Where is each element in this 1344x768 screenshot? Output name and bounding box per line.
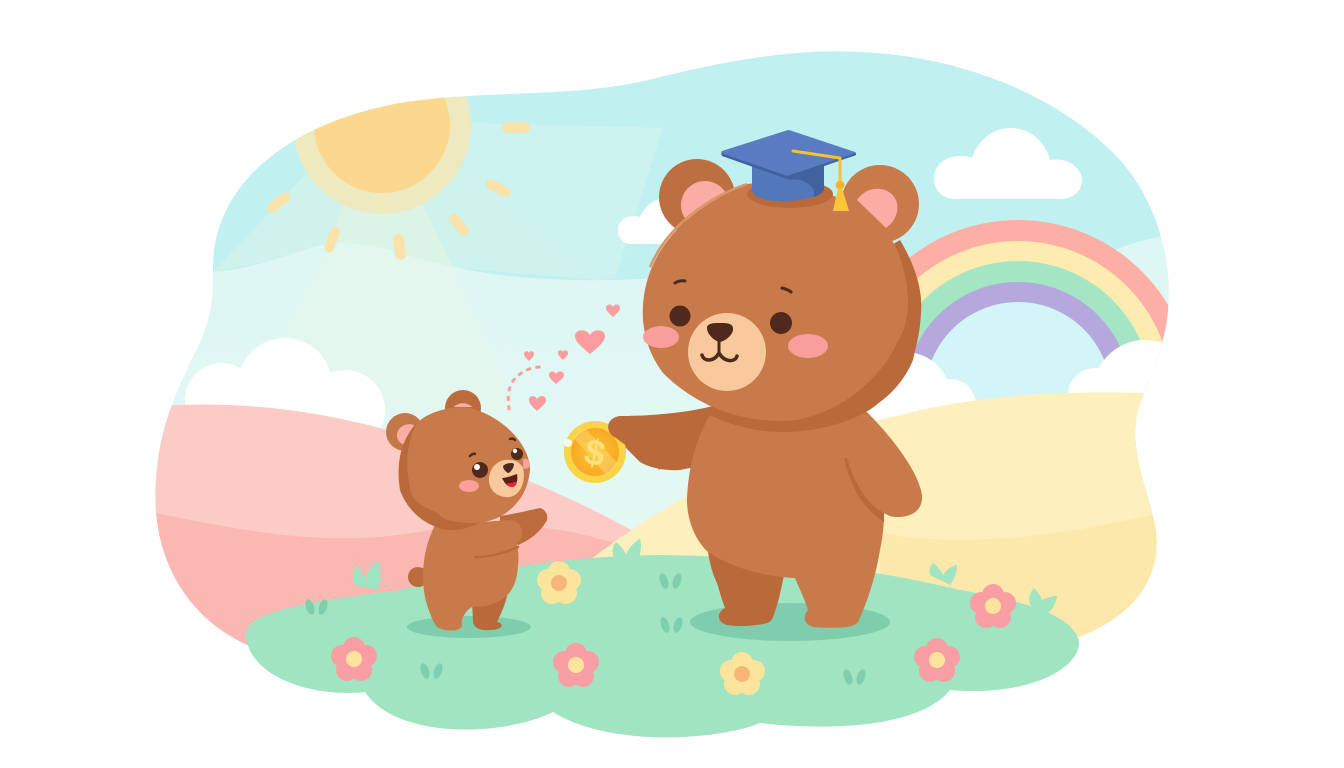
flower: yellow lower [720,652,765,695]
cloud behind bear ear [618,198,700,244]
cap shadow on head [747,180,833,208]
sky background [156,51,1169,510]
small bear body [423,520,518,631]
big bear hand over coin [608,415,660,470]
small bear head shadow [399,423,480,530]
flower: pink left [331,637,377,681]
big bear arm holding coin [608,404,720,470]
pink hill back [155,404,632,645]
flower: pink right upper [970,584,1016,628]
sun ray dashes [265,122,530,261]
coin: $ [581,430,609,475]
flowers [331,561,1016,695]
grass tufts [353,539,1057,615]
small bear tail [408,567,428,587]
cap tassel [793,151,840,185]
grass mound [246,555,1079,737]
pink hill front [156,513,613,646]
flower: pink centre [553,643,599,687]
panel: sky scene [140,36,1197,660]
small bear near arm [460,520,522,557]
big bear arm crease [844,458,884,522]
sky light beams upper [213,123,663,280]
graduation cap [721,130,856,211]
small bear ear [386,413,424,451]
small bear face [459,439,530,497]
small grass leaf pairs [304,572,867,686]
yellow hill back [592,392,1157,638]
big bear head [643,183,908,421]
big bear body, arm and right leg [687,410,922,628]
coin [564,421,626,483]
illustration: big bear handing a coin to a small bear [155,51,1169,738]
clouds behind hills [185,338,1197,450]
lower sky beams [287,245,517,410]
big bear left ear [659,159,735,235]
big bear shadow [690,603,890,641]
yellow hill front [880,514,1157,638]
cap board [721,130,856,176]
cap base [752,165,824,201]
small bear [386,390,547,638]
small bear back leg [472,590,508,630]
flower: yellow centre-left [537,561,581,604]
cloud upper right [934,128,1082,199]
small bear shadow [407,616,531,638]
hearts and dotted path [508,304,620,411]
small bear arm far [500,508,547,545]
lower sky wave [172,236,1168,530]
big bear [643,130,922,641]
rainbow [910,220,1168,508]
flower: pink right lower [914,638,960,682]
big bear face [643,281,828,391]
small bear ear back [445,390,481,426]
sun [294,96,471,214]
big bear head shadow [710,240,921,432]
small bear head [407,407,530,523]
big bear left leg [708,552,785,626]
big bear right ear [841,165,919,243]
